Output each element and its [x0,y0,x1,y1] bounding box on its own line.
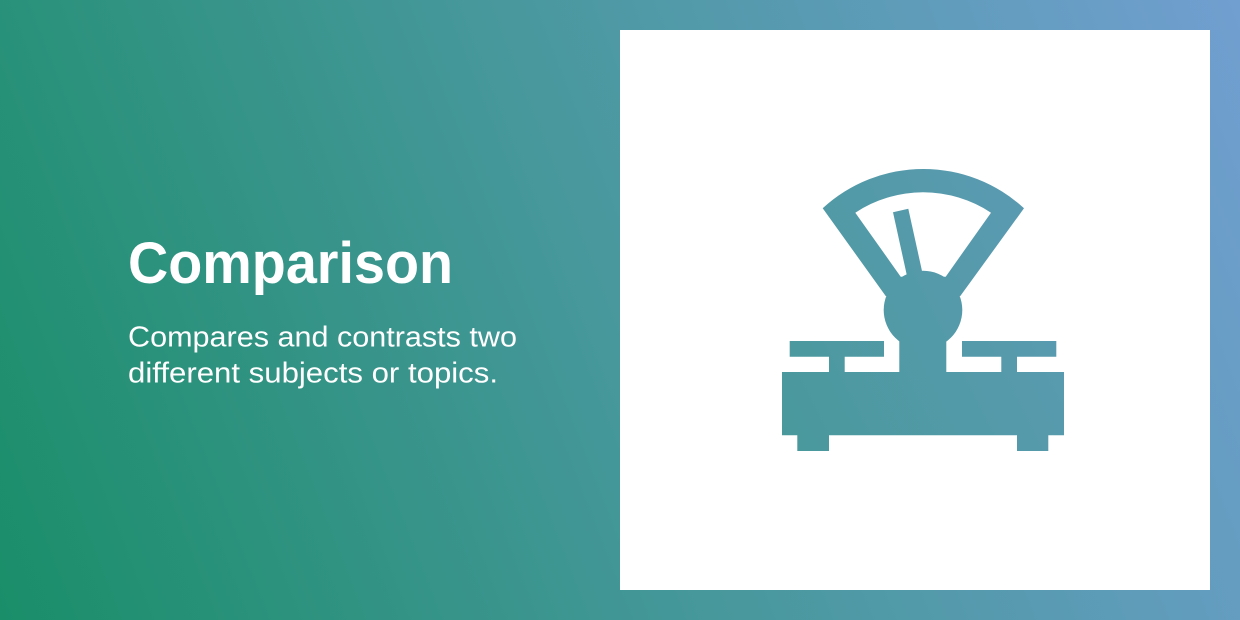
center column [899,340,946,374]
scale hub [884,271,962,349]
scale base with feet [782,372,1064,451]
right pan [962,341,1056,373]
icon: weighing scale [782,169,1064,451]
left pan [790,341,884,373]
description text: Compares and contrasts two [128,322,517,354]
title: Comparison [128,231,453,296]
scale dial fan [823,169,1024,296]
scale needle [893,209,922,276]
description text: different subjects or topics. [128,358,498,390]
description text [128,322,517,390]
panel: white icon card [620,30,1210,590]
